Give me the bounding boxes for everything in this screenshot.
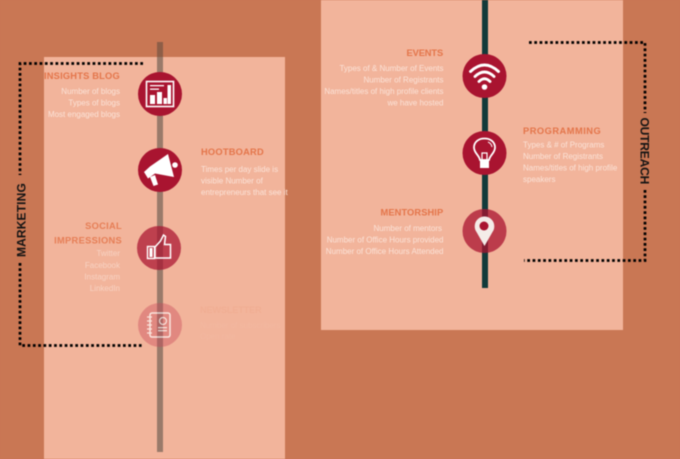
- text: events details: [324, 64, 444, 108]
- text: events details: Types of & Number of Events: [339, 64, 444, 73]
- text: insights blog details: [48, 87, 120, 119]
- icon: light bulb: [462, 131, 506, 175]
- text: hootboard details: [201, 165, 288, 197]
- panel: marketing: [44, 42, 285, 459]
- heading: social impressions: IMPRESSIONS: [54, 236, 122, 246]
- icon: thumbs up: [137, 226, 181, 270]
- text: hootboard details: entrepreneurs that see it: [201, 188, 288, 197]
- marketing dotted bracket: [20, 64, 144, 346]
- text: insights blog details: Most engaged blogs: [48, 110, 120, 119]
- text: newsletter details, faded: [200, 321, 280, 341]
- text: newsletter details, faded: Open rate: [200, 332, 236, 341]
- heading: programming: PROGRAMMING: [523, 126, 601, 136]
- icon: insights chart: [138, 72, 182, 116]
- text: insights blog details: Types of blogs: [68, 98, 120, 108]
- heading: hootboard: HOOTBOARD: [201, 147, 264, 157]
- outreach dotted bracket: [524, 42, 645, 260]
- icon: notebook: [138, 303, 182, 347]
- text: insights blog details: Number of blogs: [61, 87, 120, 96]
- text: programming details: [523, 140, 618, 184]
- text: mentorship details: Number of Office Hours provided: [327, 236, 444, 244]
- text: programming details: speakers: [523, 175, 555, 184]
- heading: mentorship: MENTORSHIP: [380, 208, 444, 218]
- icon: megaphone: [138, 148, 182, 192]
- text: social details: Facebook: [85, 261, 121, 270]
- text: programming details: Number of Registrants: [523, 152, 603, 161]
- text: events details: Names/titles of high profile clients: [324, 87, 444, 96]
- text: hootboard details: Times per day slide is: [201, 165, 278, 174]
- heading: social impressions: SOCIAL: [85, 221, 122, 231]
- text: social details: Instagram: [84, 272, 120, 282]
- outreach label: OUTREACH: [638, 118, 652, 184]
- text: events details: we have hosted: [386, 98, 444, 108]
- text: mentorship details: Number of Office Hours Attended: [326, 247, 444, 256]
- icon: wifi: [462, 54, 506, 98]
- text: programming details: Types & # of Programs: [523, 140, 604, 150]
- text: social details: LinkedIn: [90, 284, 120, 293]
- heading: events: EVENTS: [406, 48, 444, 58]
- text: social details: Twitter: [96, 249, 120, 258]
- text: mentorship details: [326, 224, 444, 256]
- text: social details: [84, 249, 121, 293]
- text: events details: Number of Registrants: [363, 76, 444, 84]
- panel: outreach: [321, 0, 623, 330]
- heading: insights blog: INSIGHTS BLOG: [44, 71, 120, 81]
- heading: social impressions: [54, 221, 122, 246]
- marketing timeline line: [157, 42, 163, 452]
- text: newsletter details, faded: Number of subscribers: [200, 321, 280, 330]
- icon: map pin: [462, 209, 506, 253]
- text: programming details: Names/titles of high profile: [523, 164, 618, 172]
- text: mentorship details: Number of mentors: [374, 224, 442, 233]
- marketing label: MARKETING: [14, 183, 28, 257]
- text: hootboard details: visible Number of: [201, 176, 264, 186]
- outreach timeline line: [482, 0, 488, 288]
- heading: newsletter, faded: NEWSLETTER: [200, 305, 262, 315]
